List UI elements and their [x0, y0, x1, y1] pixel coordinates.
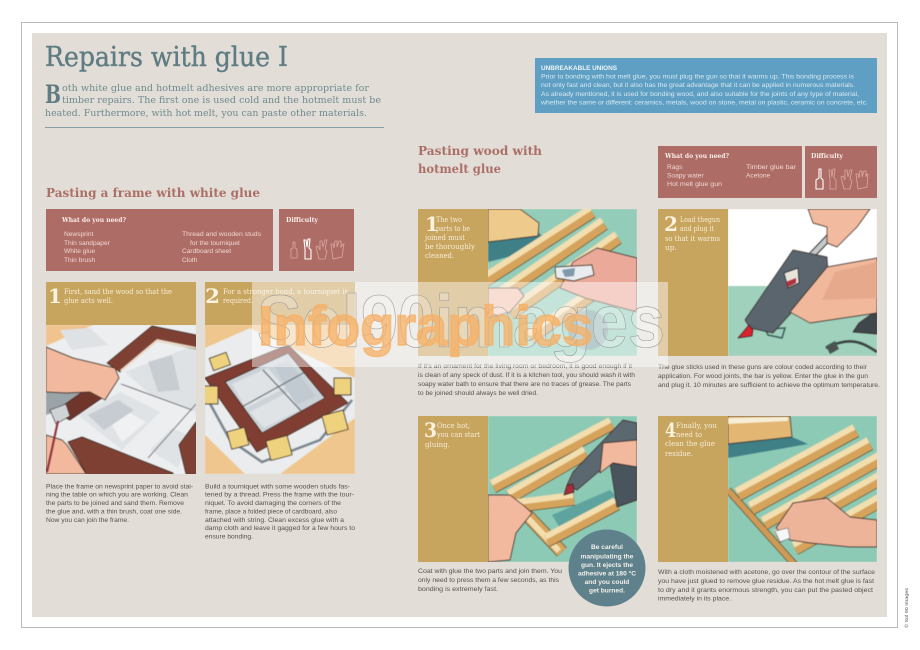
- panel: materials, frame: Cloth: [182, 257, 198, 264]
- panel: wood step 2: 2: [664, 212, 678, 236]
- illustration: sanding a frame: [46, 325, 196, 480]
- text: step 4 instructions: immediately in its place.: [658, 596, 731, 602]
- panel: materials, frame: What do you need?: [61, 216, 126, 224]
- panel: frame step 1: First, sand the wood so that the: [64, 287, 172, 296]
- panel: wood step 1: cleaned.: [425, 251, 454, 260]
- panel: materials, frame: for the tourniquet: [190, 240, 240, 247]
- panel: wood step 3: Once hot,: [437, 421, 470, 430]
- text: step 2 instructions: damp cloth and leave it gagged for a few hours to: [205, 525, 355, 532]
- text: step 2 instructions: [205, 483, 355, 541]
- text: step 3 instructions: only need to press them a few seconds, as this: [418, 577, 560, 584]
- callout: safety warning circle: [568, 530, 646, 606]
- panel: frame step 2: [203, 282, 355, 541]
- text: step 1 instructions: is clean of any speck of dust. If it is a kitchen tool, you should wash it with: [418, 372, 635, 379]
- text: step 1 instructions: If it's an ornament for the living room or bedroom, it is good enough if it: [418, 363, 632, 370]
- text: step 2 instructions: Build a tourniquet with some wooden studs fas-: [205, 483, 350, 490]
- panel: materials, wood: Soapy water: [667, 172, 704, 180]
- callout: safety warning circle: get burned.: [589, 588, 625, 594]
- panel: difficulty, wood: [805, 146, 877, 198]
- panel: materials, frame: Thin sandpaper: [64, 240, 111, 247]
- text: step 4 instructions: you have just glued to remove glue residue. As the hot melt glue is fast: [658, 578, 874, 585]
- panel: wood step 2: Load thegun: [680, 215, 720, 224]
- intro text: timber repairs. The first one is used cold and the hotmelt must be: [62, 95, 381, 106]
- panel: wood step 2: so that it warms: [665, 234, 720, 243]
- callout: unbreakable unions: [535, 58, 877, 113]
- panel: materials, wood: [658, 146, 802, 198]
- text: step 2 instructions: and plug it. 10 minutes are sufficient to achieve the optimum temperature.: [658, 382, 880, 389]
- heading: pasting wood: hotmelt glue: [418, 161, 501, 176]
- text: step 2 instructions: attached with string. Clean excess glue with a: [205, 517, 344, 524]
- panel: frame step 2: required.: [223, 296, 253, 305]
- panel: materials, wood: Timber glue bar: [746, 164, 797, 171]
- text: step 4 instructions: to dry and it grants enormous strength, you can put the pasted object: [658, 587, 873, 594]
- panel: difficulty, frame: [279, 209, 354, 271]
- intro text: [45, 80, 381, 119]
- panel: wood step 3: gluing.: [425, 440, 450, 449]
- intro text: oth white glue and hotmelt adhesives are more appropriate for: [62, 83, 369, 94]
- text: step 2 instructions: [658, 364, 880, 389]
- callout: unbreakable unions: UNBREAKABLE UNIONS: [541, 65, 618, 72]
- panel: wood step 3: [418, 416, 637, 593]
- illustration: applying glue with the gun: [485, 416, 637, 562]
- text: step 1 instructions: Now you can join the frame.: [46, 517, 129, 524]
- panel: frame step 1: 1: [48, 284, 62, 308]
- panel: wood step 1: parts to be: [436, 224, 470, 233]
- illustration: hot melt glue gun: [728, 209, 877, 356]
- panel: materials, wood: What do you need?: [664, 152, 729, 160]
- text: step 2 instructions: application. For wood joints, the bar is yellow. Enter the glue in the gun: [658, 373, 868, 380]
- text: step 1 instructions: to be joined should always be well dried.: [418, 390, 538, 397]
- panel: wood step 4: [658, 416, 884, 602]
- panel: wood step 1: joined must: [424, 233, 465, 242]
- text: step 4 instructions: With a cloth moistened with acetone, go over the contour of the surface: [658, 569, 875, 576]
- panel: materials, wood: Hot melt glue gun: [667, 181, 722, 188]
- panel: wood step 4: clean the glue: [665, 439, 715, 448]
- text: step 2 instructions: niquet. To avoid damaging the corners of the: [205, 500, 341, 507]
- text: step 4 instructions: [658, 569, 875, 602]
- text: step 2 instructions: The glue sticks used in these guns are colour coded according to their: [658, 364, 868, 371]
- text: step 1 instructions: ning the table on which you are working. Clean: [46, 492, 188, 499]
- intro text: B: [45, 80, 61, 109]
- panel: materials, frame: Thread and wooden studs: [182, 231, 262, 238]
- panel: wood step 4: Finally, you: [676, 421, 717, 430]
- callout: safety warning circle: gun. It ejects the: [581, 562, 633, 569]
- panel: wood step 3: you can start: [436, 430, 480, 439]
- panel: wood step 1: [418, 208, 637, 397]
- panel: wood step 4: need to: [676, 430, 703, 439]
- text: step 2 instructions: ensure bonding.: [205, 534, 253, 541]
- panel: wood step 4: residue.: [665, 449, 693, 458]
- panel: wood step 1: 1: [425, 212, 439, 236]
- panel: frame step 2: 2: [205, 284, 220, 308]
- heading: pasting wood: [418, 143, 542, 176]
- text: step 1 instructions: Place the frame on newsprint paper to avoid stai-: [46, 483, 193, 490]
- illustration: cleaning glue residue: [728, 416, 884, 565]
- text: step 3 instructions: [418, 568, 562, 593]
- panel: wood step 2: [658, 209, 880, 389]
- panel: wood step 1: be thoroughly: [425, 242, 476, 251]
- title: Repairs with glue I: [45, 42, 288, 73]
- panel: wood step 1: The two: [436, 215, 462, 224]
- illustration: frame held by tourniquet: [203, 325, 355, 474]
- panel: difficulty, frame: Difficulty: [286, 216, 318, 224]
- callout: unbreakable unions: As already mentioned, it is used for bonding wood, and also suitable for the joints of any type of material,: [541, 91, 859, 98]
- callout: unbreakable unions: not only fast and clean, but it also has the great advantage that it can be applied in numerous materials.: [541, 82, 855, 89]
- copyright note: © Sol 90 Images: [903, 587, 909, 628]
- panel: wood step 2: and plug it: [680, 224, 714, 233]
- text: step 2 instructions: frame, place a folded piece of cardboard, also: [205, 508, 337, 515]
- callout: safety warning circle: adhesive at 180 °C: [578, 570, 636, 578]
- text: step 3 instructions: bonding is extremely fast.: [418, 586, 498, 593]
- panel: difficulty, wood: Difficulty: [811, 152, 843, 160]
- panel: wood step 4: 4: [665, 418, 676, 442]
- panel: frame step 1: glue acts well.: [64, 296, 113, 305]
- callout: safety warning circle: and you could: [585, 579, 629, 586]
- panel: frame step 1: [46, 282, 196, 524]
- panel: materials, frame: [46, 209, 273, 271]
- callout: unbreakable unions: whether the same or different: ceramics, metals, wood on stone, metal on plastic, ceramic on concrete, etc.: [540, 100, 868, 106]
- illustration: cleaning wooden parts: [478, 208, 637, 356]
- text: step 3 instructions: Coat with glue the two parts and join them. You: [418, 568, 562, 575]
- panel: frame step 2: For a stronger bond, a tourniquet is: [223, 287, 348, 296]
- text: step 1 instructions: [46, 483, 193, 524]
- callout: safety warning circle: manipulating the: [581, 554, 634, 560]
- panel: wood step 3: 3: [424, 418, 437, 442]
- panel: materials, frame: White glue: [64, 248, 95, 255]
- icon: difficulty hands, level 2 of 4: [291, 239, 344, 259]
- panel: materials, frame: Cardboard sheet: [182, 248, 231, 255]
- panel: materials, frame: Newsprint: [64, 231, 93, 238]
- watermark: Infographics: [258, 294, 593, 357]
- text: step 1 instructions: soapy water bath to ensure that there are no traces of grease. The parts: [418, 381, 632, 388]
- intro text: heated. Furthermore, with hot melt, you can paste other materials.: [45, 108, 367, 119]
- callout: safety warning circle: Be careful: [591, 544, 623, 551]
- text: step 1 instructions: the parts to be joined and sand them. Remove: [46, 500, 184, 507]
- heading: pasting wood: Pasting wood with: [418, 143, 542, 158]
- icon: difficulty hands, level 1 of 4: [816, 169, 868, 189]
- panel: wood step 2: up.: [665, 243, 677, 252]
- callout: unbreakable unions: Prior to bonding with hot melt glue, you must plug the gun so that it warms up. This bonding process is: [541, 74, 855, 80]
- panel: materials, wood: Rags: [667, 164, 683, 171]
- panel: materials, wood: Acetone: [746, 172, 771, 180]
- text: step 2 instructions: tened by a thread. Press the frame with the tour-: [205, 492, 354, 499]
- heading: pasting a frame: Pasting a frame with white glue: [46, 185, 260, 200]
- text: step 1 instructions: [418, 363, 635, 397]
- text: step 1 instructions: the glue and, with a thin brush, coat one side.: [46, 508, 182, 515]
- watermark: Sol90images: [257, 280, 665, 363]
- panel: materials, frame: Thin brush: [64, 257, 95, 264]
